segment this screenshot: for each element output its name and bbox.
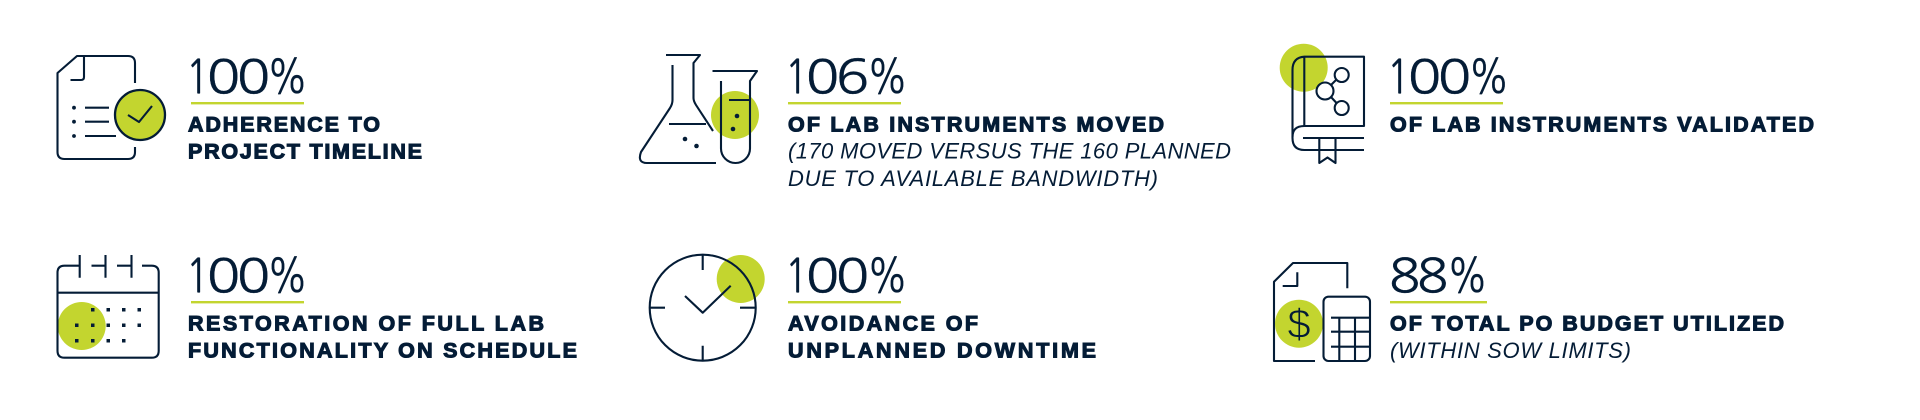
icon: budget document and calculator: $ — [1287, 300, 1311, 347]
stat: 100%: 1 — [1387, 54, 1410, 100]
stat: 106%: 1 — [785, 54, 808, 100]
text: moved versus planned note: (170 MOVED VERSUS THE 160 PLANNED — [788, 138, 1231, 164]
panel: lab instruments moved — [640, 54, 1231, 191]
text: restoration of full lab functionality on schedule: FUNCTIONALITY ON SCHEDULE — [188, 338, 577, 362]
icon: calendar — [58, 255, 159, 358]
stat: 100%: % — [867, 252, 908, 300]
stat: 100%: % — [267, 54, 308, 100]
stat: 100%: 00 — [806, 252, 867, 300]
rule — [1390, 301, 1487, 303]
stat: 100%: 1 — [785, 252, 808, 300]
rule — [191, 102, 304, 104]
rule — [1390, 102, 1503, 104]
stat: 100%: 00 — [207, 54, 268, 100]
rule — [191, 301, 304, 303]
rule — [788, 102, 901, 104]
text: adherence to project timeline: ADHERENCE TO — [188, 112, 380, 136]
rule — [788, 301, 901, 303]
stat: 100%: % — [267, 252, 308, 300]
stat: 100%: 1 — [186, 252, 209, 300]
panel: avoidance of unplanned downtime — [650, 252, 1096, 362]
text: adherence to project timeline: PROJECT TIMELINE — [188, 140, 422, 164]
icon: budget document and calculator — [1274, 263, 1370, 361]
text: of lab instruments moved: OF LAB INSTRUMENTS MOVED — [788, 112, 1164, 136]
stat: 88%: % — [1447, 252, 1488, 300]
stat: 100%: 00 — [207, 252, 268, 300]
icon: book with share nodes — [1280, 44, 1364, 163]
text: restoration of full lab functionality on schedule: RESTORATION OF FULL LAB — [188, 312, 544, 336]
stat: 100%: 1 — [186, 54, 209, 100]
text: within SOW limits: (WITHIN SOW LIMITS) — [1390, 338, 1631, 363]
panel: adherence to project timeline — [58, 54, 422, 164]
panel: restoration of lab functionality — [58, 252, 577, 362]
stat: 106%: 06 — [806, 54, 867, 100]
stat: 88%: 88 — [1389, 252, 1446, 300]
panel: total PO budget utilized — [1274, 252, 1784, 363]
panel: lab instruments validated — [1280, 44, 1814, 163]
text: moved versus planned note: DUE TO AVAILABLE BANDWIDTH) — [788, 166, 1158, 191]
icon: document with check mark — [58, 56, 165, 159]
text: of lab instruments validated: OF LAB INSTRUMENTS VALIDATED — [1390, 112, 1814, 136]
icon: clock — [650, 255, 765, 361]
text: of total PO budget utilized: OF TOTAL PO BUDGET UTILIZED — [1390, 312, 1784, 336]
text: avoidance of unplanned downtime: UNPLANNED DOWNTIME — [788, 338, 1096, 362]
stat: 100%: % — [1468, 54, 1510, 100]
icon: flask and test tube — [640, 55, 759, 163]
stat: 106%: % — [867, 54, 908, 100]
stat: 100%: 00 — [1408, 54, 1469, 100]
text: avoidance of unplanned downtime: AVOIDANCE OF — [788, 312, 978, 336]
